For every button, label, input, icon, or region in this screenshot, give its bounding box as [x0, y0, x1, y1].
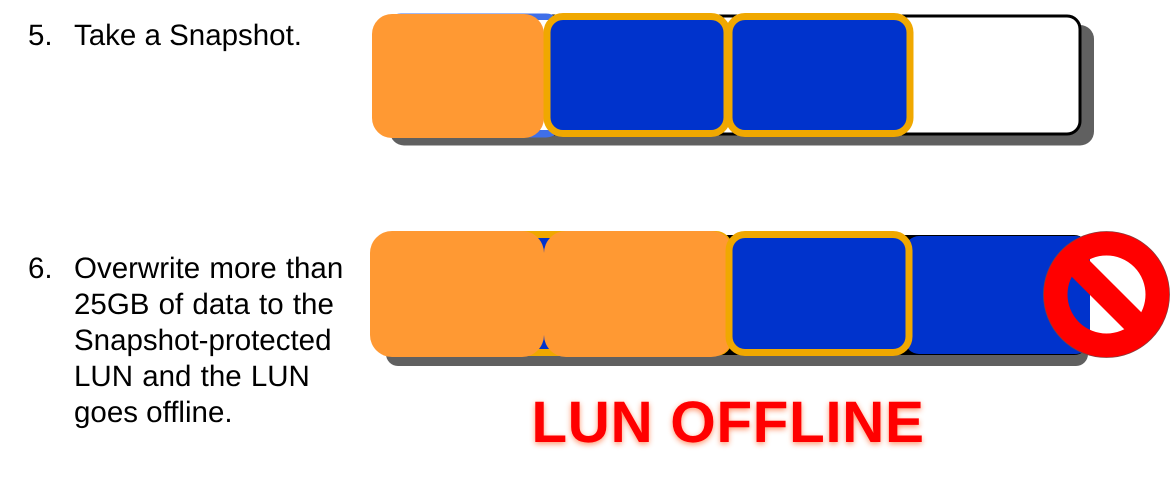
- blue wedges between orange blocks: [530, 238, 560, 349]
- step 5 text: Take a Snapshot.: [74, 19, 302, 52]
- LUN bar outline: [385, 16, 1080, 134]
- bar shadow: [390, 25, 1094, 146]
- step 6 text: Snapshot-protected: [74, 324, 331, 357]
- block: blue data 2: [729, 16, 910, 134]
- block: full blue data: [905, 236, 1090, 354]
- callout: LUN OFFLINE: LUN OFFLINE: [531, 392, 925, 457]
- step 5 text: 5.: [28, 19, 53, 52]
- callout: LUN OFFLINE: LUN OFFLINE: [531, 390, 925, 455]
- bar shadow: [386, 246, 1088, 366]
- step 6 text: LUN and the LUN: [74, 360, 310, 393]
- step 6 text: 6.: [28, 252, 53, 285]
- step 6 text: [28, 252, 343, 429]
- gold base behind orange blocks: [385, 231, 732, 356]
- block: orange 1: [370, 231, 544, 357]
- block: orange snapshot reserve: [372, 14, 544, 138]
- icon: prohibited sign: [1044, 232, 1170, 358]
- diagram: LUN overwritten: [370, 231, 1090, 366]
- block: blue data with gold border: [729, 234, 909, 352]
- step 6 text: goes offline.: [74, 396, 233, 429]
- step 6 text: Overwrite more than: [74, 252, 343, 285]
- block: orange 2: [544, 231, 733, 357]
- white gap: [538, 20, 552, 130]
- LUN bar outline: [385, 236, 1088, 354]
- light blue block behind: [385, 14, 562, 138]
- diagram: snapshot taken: [372, 14, 1094, 146]
- step 6 text: 25GB of data to the: [74, 288, 334, 321]
- block: blue data 1: [547, 16, 727, 134]
